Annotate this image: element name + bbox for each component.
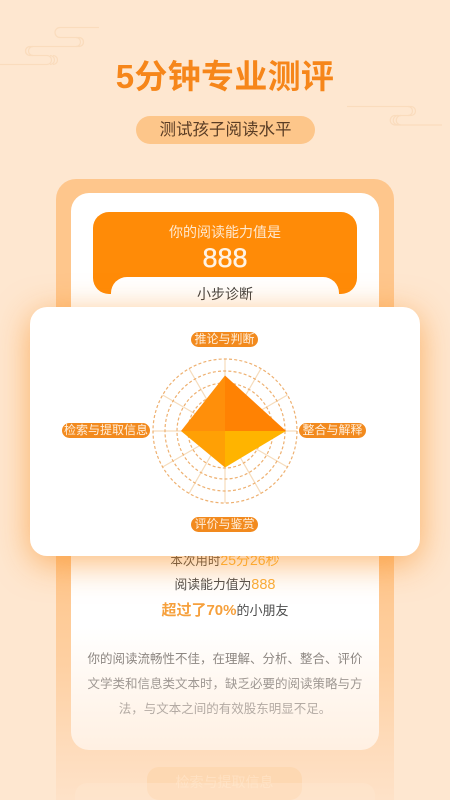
decorative clouds <box>0 27 442 126</box>
subtitle pill <box>136 116 315 144</box>
faded next section pill <box>147 767 302 800</box>
score header <box>93 212 357 294</box>
panel: radar chart card with glow <box>30 307 420 556</box>
result text: time: 本次用时25分26秒 <box>170 552 280 568</box>
diagnosis tab <box>111 277 339 317</box>
radar chart <box>152 358 298 504</box>
panel: inner white card <box>71 193 379 750</box>
label: evaluate and appreciate: 评价与鉴赏 <box>194 517 254 531</box>
faded next section card <box>75 783 375 800</box>
description paragraph: 你的阅读流畅性不佳，在理解、分析、整合、评价 <box>87 652 362 666</box>
result text: percentile: 超过了70%的小朋友 <box>161 602 289 619</box>
description paragraph <box>87 652 362 716</box>
diagnosis tab: 小步诊断 <box>197 286 253 302</box>
panel: outer report card <box>56 179 394 800</box>
radar data diamond <box>181 376 286 468</box>
result text: score: 阅读能力值为888 <box>174 577 275 593</box>
faded next section pill: 检索与提取信息 <box>176 774 274 790</box>
label: retrieve information: 检索与提取信息 <box>64 423 148 437</box>
label: inference and judgment: 推论与判断 <box>194 332 254 346</box>
description paragraph: 法，与文本之间的有效股东明显不足。 <box>119 702 331 716</box>
label: integrate and interpret: 整合与解释 <box>302 423 362 437</box>
title: 5分钟专业测评 <box>116 58 334 95</box>
score caption: 你的阅读能力值是 <box>169 224 281 240</box>
description paragraph: 文学类和信息类文本时，缺乏必要的阅读策略与方 <box>87 677 362 691</box>
subtitle pill: 测试孩子阅读水平 <box>160 121 292 139</box>
score value: 888 <box>202 243 248 273</box>
